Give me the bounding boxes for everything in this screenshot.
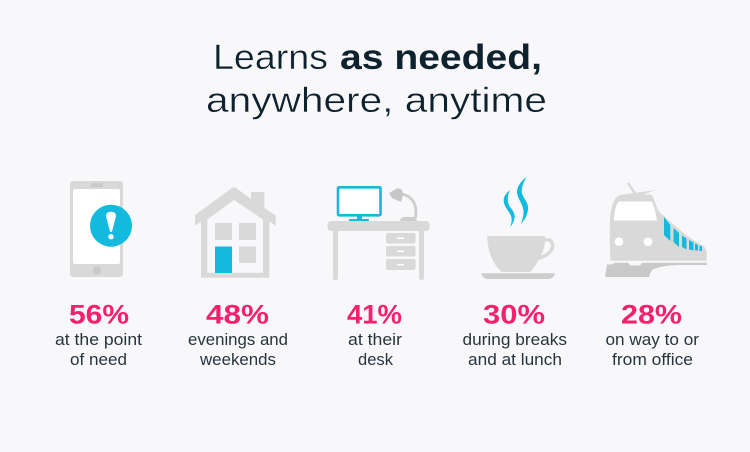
stat: 30% during breaks and at lunch: and at lunch <box>468 351 562 369</box>
icon: coffee cup with steam <box>481 177 555 279</box>
title: as needed, <box>340 38 542 77</box>
stat: 56% at the point of need: at the point <box>55 331 142 349</box>
stat: 28% on way to or from office: from office <box>612 351 693 369</box>
stat: 28% on way to or from office: on way to or <box>606 331 700 349</box>
stat: 48% evenings and weekends <box>188 300 288 369</box>
icon: smartphone with alert <box>70 181 132 277</box>
icon: house <box>195 187 276 278</box>
stat: 30% during breaks and at lunch <box>462 300 567 369</box>
stat: 56% at the point of need: of need <box>70 351 127 369</box>
icon: train <box>605 183 707 277</box>
stat: 48% evenings and weekends: 48% <box>206 300 269 330</box>
stat: 41% at their desk: at their <box>348 331 403 349</box>
stat: 28% on way to or from office <box>606 300 700 369</box>
stat: 48% evenings and weekends: evenings and <box>188 331 288 349</box>
stat: 28% on way to or from office: 28% <box>621 300 682 330</box>
title <box>206 38 547 120</box>
stat: 56% at the point of need <box>55 300 142 369</box>
stat: 56% at the point of need: 56% <box>69 300 129 330</box>
icon: desk with monitor and lamp <box>328 187 430 280</box>
stat: 41% at their desk <box>347 300 403 369</box>
title: anywhere, anytime <box>206 81 547 120</box>
stat: 30% during breaks and at lunch: 30% <box>483 300 545 330</box>
stat: 41% at their desk: desk <box>358 351 394 369</box>
title: Learns <box>213 38 328 77</box>
stat: 41% at their desk: 41% <box>347 300 402 330</box>
stat: 48% evenings and weekends: weekends <box>199 351 276 369</box>
stat: 30% during breaks and at lunch: during breaks <box>462 331 567 349</box>
